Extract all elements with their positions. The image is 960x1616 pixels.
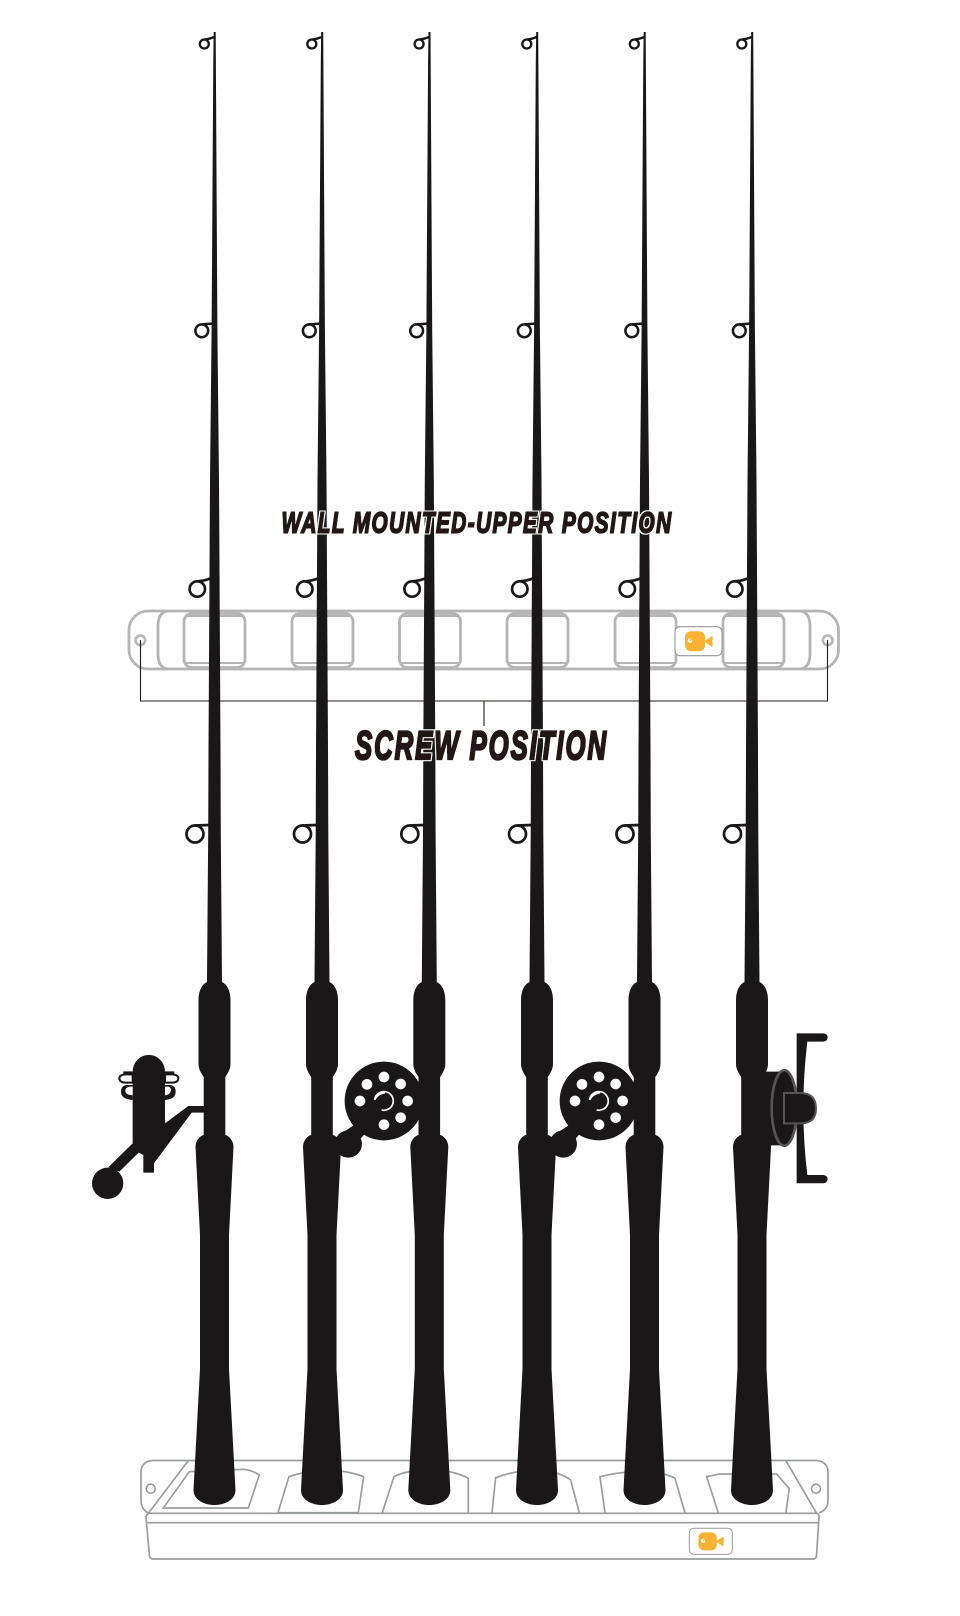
heading: screw position: SCREW POSITION [355,724,608,768]
spinning reel on rod 1 [92,1055,204,1199]
upper rack outline [129,611,838,669]
baitcasting reel on rod 6 [760,1033,828,1183]
fly reel on rod 4 [550,1062,638,1158]
lower rack camera badge [689,1528,732,1554]
fishing rods [186,32,773,1505]
reel knob [784,1093,816,1123]
lower rack back plate [141,1460,828,1513]
lower rack [141,1460,828,1559]
rod 2 [294,32,343,1505]
rod 3 [401,32,450,1505]
lower rack screw holes [146,1484,820,1493]
fly reel on rod 2 [335,1062,423,1158]
screw position leader line [140,640,828,726]
rod 1 [186,32,236,1505]
lower rack front bar [146,1513,819,1559]
reel frame bracket [797,1033,828,1183]
reel spool [772,1070,797,1146]
heading: wall mounted upper position: WALL MOUNTED-UPPER POSITION [282,507,672,539]
rod 4 [509,32,558,1505]
upper rack screw holes [136,636,832,645]
upper rack slots [184,614,784,668]
reel spool base [760,1072,787,1145]
upper rack [129,611,838,669]
rod 6 [724,32,773,1505]
upper rack camera badge [675,627,722,656]
rod 5 [616,32,666,1505]
lower rack slots [148,1461,817,1513]
